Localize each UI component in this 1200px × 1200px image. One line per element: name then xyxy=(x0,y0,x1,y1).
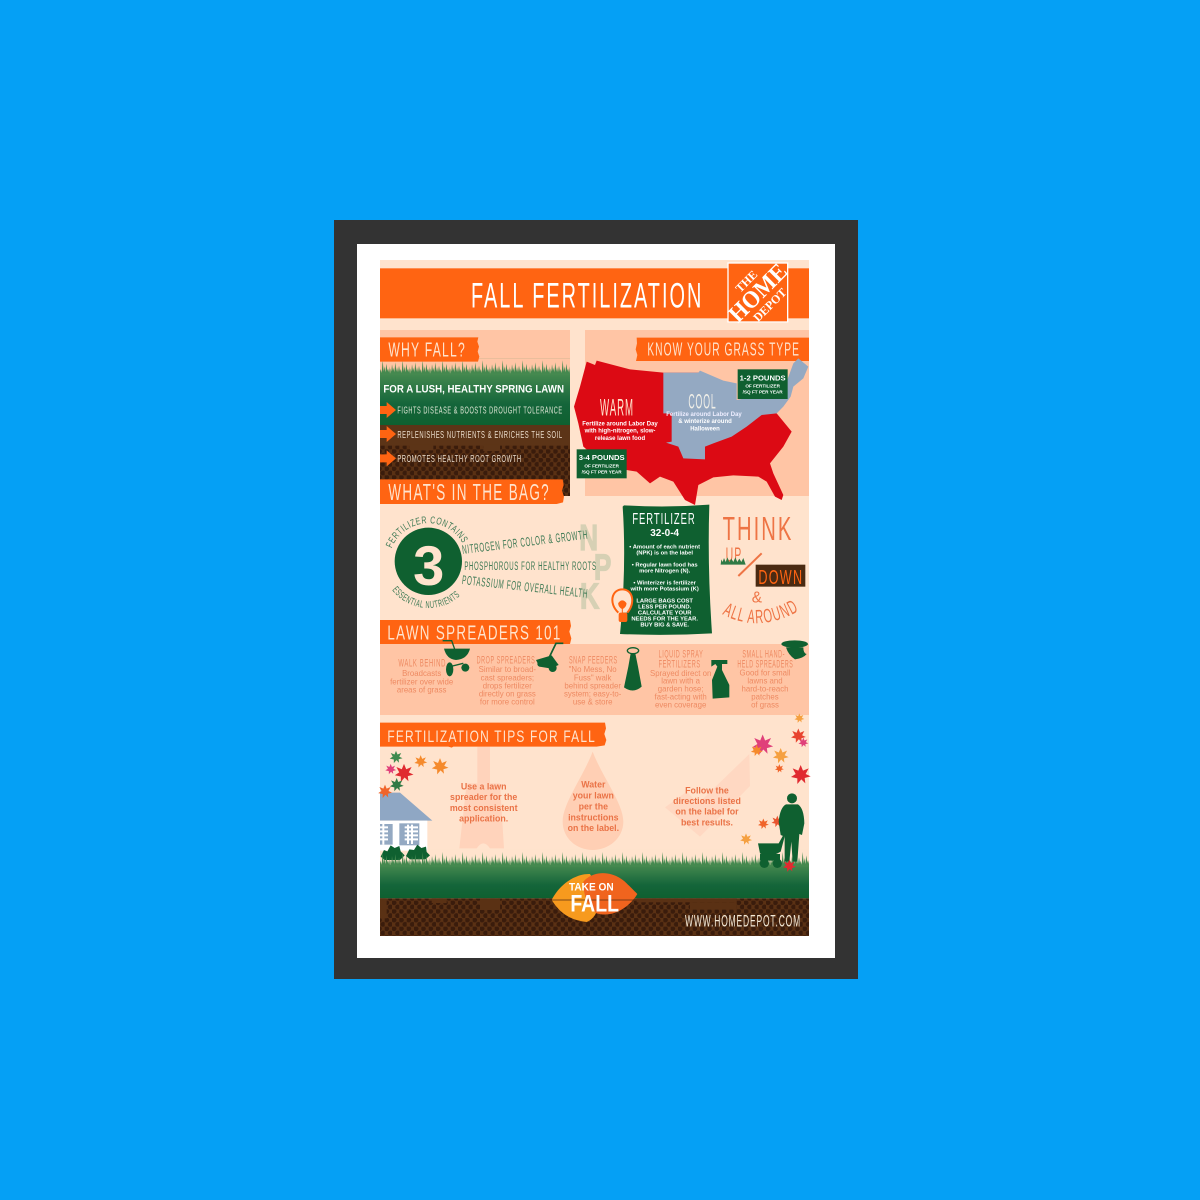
column: drop spreaders xyxy=(477,654,536,706)
column: snap feeders: system; easy-to- xyxy=(564,689,622,698)
icon: light bulb xyxy=(612,589,632,622)
column: walk behind: fertilizer over wide xyxy=(390,677,453,686)
cool label xyxy=(666,388,742,432)
tip 1 xyxy=(450,781,518,824)
column: drop spreaders: DROP SPREADERS xyxy=(477,654,535,666)
icon: walk behind spreader xyxy=(443,641,470,676)
fertilizer bag: CALCULATE YOUR xyxy=(638,611,692,617)
map: warm region xyxy=(574,361,792,505)
column: liquid spray: even coverage xyxy=(655,700,706,709)
fertilizer bag: more Nitrogen (N). xyxy=(639,568,691,574)
panel: lawn spreaders xyxy=(380,620,809,715)
slash xyxy=(738,553,762,576)
leaves: right cluster xyxy=(740,713,811,845)
what's in the bag banner xyxy=(380,479,564,505)
column: snap feeders: "No Mess, No xyxy=(569,665,617,674)
column: walk behind: Broadcasts xyxy=(402,669,441,678)
title bar xyxy=(380,268,809,318)
column: hand-held spreaders: hard-to-reach xyxy=(741,685,788,694)
callout: 1-2 pounds: 1-2 POUNDS xyxy=(740,374,786,383)
what's in the bag banner: WHAT'S IN THE BAG? xyxy=(388,479,550,505)
ghost icon: water drop xyxy=(563,752,623,850)
tips banner: FERTILIZATION TIPS FOR FALL xyxy=(387,727,596,746)
tip 2: on the label. xyxy=(568,823,619,833)
benefit 3: PROMOTES HEALTHY ROOT GROWTH xyxy=(397,454,522,465)
icon: hand-held spreader xyxy=(781,640,808,659)
fertilizer bag: • Amount of each nutrient xyxy=(629,544,700,550)
column: liquid spray: FERTILIZERS xyxy=(659,658,701,670)
icon: drop spreader xyxy=(536,643,563,672)
logo: The Home Depot: THE xyxy=(732,267,760,295)
grass type banner xyxy=(636,338,809,361)
fertilizer bag: LARGE BAGS COST xyxy=(636,598,693,604)
shrubs xyxy=(381,845,430,860)
column: liquid spray: lawn with a xyxy=(661,677,701,686)
benefit 2 xyxy=(380,426,563,442)
icon: snap feeder xyxy=(624,648,642,691)
cool label: Halloween xyxy=(690,426,720,432)
logo: The Home Depot: HOME xyxy=(724,259,793,328)
column: liquid spray: garden hose; xyxy=(658,685,704,694)
warm label: with high-nitrogen, slow- xyxy=(584,429,655,435)
arc label bottom: ESSENTIAL NUTRIENTS xyxy=(392,586,460,608)
tip 3: directions listed xyxy=(673,796,741,806)
panel: grass type xyxy=(574,330,809,505)
nutrient: potassium: POTASSIUM FOR OVERALL HEALTH xyxy=(461,573,589,601)
lawn spreaders banner xyxy=(380,620,571,645)
benefit 3 xyxy=(380,450,522,466)
soil strip xyxy=(380,898,809,936)
fertilizer bag: • Regular lawn food has xyxy=(632,562,698,568)
column: drop spreaders: drops fertilizer xyxy=(483,681,532,690)
ghost icon: spreader xyxy=(459,747,504,848)
leaf at feet xyxy=(783,859,796,872)
callout: 3-4 pounds xyxy=(577,449,627,478)
NPK letters xyxy=(579,517,611,617)
take on fall leaf badge: FALL xyxy=(570,890,619,917)
column: snap feeders: use & store xyxy=(573,697,612,706)
fertilizer bag: NEEDS FOR THE YEAR. xyxy=(631,617,698,623)
tip 2: instructions xyxy=(568,812,619,822)
fertilizer bag: FERTILIZER xyxy=(632,511,696,528)
all around: ALL AROUND xyxy=(722,600,796,624)
up with grass xyxy=(721,544,746,567)
warm label xyxy=(582,395,658,442)
NPK letters: P xyxy=(594,546,611,587)
column: snap feeders: behind spreader xyxy=(564,681,621,690)
benefit 1 xyxy=(380,402,563,418)
column: snap feeders xyxy=(564,654,622,706)
tip 2: your lawn xyxy=(573,791,614,801)
callout: 3-4 pounds: OF FERTILIZER xyxy=(584,463,620,468)
tip 1: Use a lawn xyxy=(461,781,506,791)
take on fall leaf badge: TAKE ON xyxy=(569,881,614,893)
grass strip xyxy=(380,850,809,898)
panel: lawn spreaders: HELD SPREADERS xyxy=(737,658,793,670)
column: walk behind: WALK BEHIND xyxy=(398,658,446,670)
ghost icon: arrow check xyxy=(665,754,750,837)
column: liquid spray: LIQUID SPRAY xyxy=(659,648,703,660)
nutrient: phosphorous: PHOSPHOROUS FOR HEALTHY ROOTS xyxy=(464,559,597,573)
fertilizer bag xyxy=(620,505,712,635)
subhead: FOR A LUSH, HEALTHY SPRING LAWN xyxy=(383,384,564,396)
cool label: & winterize around xyxy=(678,419,732,425)
down box: DOWN xyxy=(758,566,803,589)
take on fall leaf badge xyxy=(542,873,646,922)
tip 3: best results. xyxy=(681,818,733,828)
tip 2: Water xyxy=(581,780,606,790)
title bar: FALL FERTILIZATION xyxy=(471,276,703,315)
tip 2 xyxy=(568,780,619,833)
NPK letters: N xyxy=(579,517,598,558)
cool label: COOL xyxy=(688,388,717,413)
benefit 2: REPLENISHES NUTRIENTS & ENRICHES THE SOIL xyxy=(397,430,563,441)
think: THINK xyxy=(723,511,793,548)
warm label: WARM xyxy=(600,395,634,422)
tip 1: spreader for the xyxy=(450,792,517,802)
lower poster section xyxy=(378,713,811,936)
column: hand-held spreaders: Good for small xyxy=(740,669,791,678)
man with spreader xyxy=(758,793,804,868)
column: liquid spray: fast-acting with xyxy=(655,693,707,702)
column: walk behind xyxy=(390,658,453,694)
up with grass: UP xyxy=(726,544,742,567)
panel: why fall xyxy=(380,330,570,496)
column: liquid spray: Sprayed direct on xyxy=(650,669,711,678)
leaves: left cluster xyxy=(378,751,448,798)
callout: 3-4 pounds: 3-4 POUNDS xyxy=(579,453,625,462)
white mat xyxy=(357,244,835,958)
NPK letters: K xyxy=(580,576,599,617)
middle poster section xyxy=(380,504,809,715)
fertilizer bag: 32-0-4 xyxy=(650,528,680,539)
cool label: Fertilize around Labor Day xyxy=(666,412,742,418)
arc label top: FERTILIZER CONTAINS xyxy=(386,516,468,548)
tip 2: per the xyxy=(579,801,608,811)
fertilizer bag: BUY BIG & SAVE. xyxy=(640,623,689,629)
column: hand-held spreaders: patches xyxy=(751,693,779,702)
house xyxy=(380,793,432,851)
column: walk behind: areas of grass xyxy=(397,685,447,694)
icon: spray bottle xyxy=(711,660,729,699)
lawn spreaders banner: LAWN SPREADERS 101 xyxy=(387,623,562,645)
fertilizer bag: with more Potassium (K) xyxy=(629,587,699,593)
column: hand-held spreaders: of grass xyxy=(751,701,779,710)
three nutrients badge xyxy=(386,516,468,608)
nutrient: nitrogen: NITROGEN FOR COLOR & GROWTH xyxy=(461,528,589,557)
down box xyxy=(756,565,805,589)
ampersand: & xyxy=(752,590,764,607)
column: drop spreaders: for more control xyxy=(480,697,535,706)
upper poster section xyxy=(380,251,809,505)
column: drop spreaders: Similar to broad- xyxy=(479,665,536,674)
tip 1: application. xyxy=(459,814,508,824)
fertilizer bag: • Winterizer is fertilizer xyxy=(633,580,697,586)
tip 3: on the label for xyxy=(675,807,739,817)
column: hand-held spreaders: SMALL HAND- xyxy=(742,648,785,660)
soil xyxy=(380,425,570,496)
callout: 1-2 pounds: /SQ FT PER YEAR xyxy=(743,390,783,395)
logo: The Home Depot: DEPOT xyxy=(750,285,789,324)
poster background xyxy=(380,260,809,936)
three nutrients badge: 3 xyxy=(413,534,444,597)
column: drop spreaders: cast spreaders; xyxy=(481,673,534,682)
benefit 1: FIGHTS DISEASE & BOOSTS DROUGHT TOLERANCE xyxy=(397,405,563,416)
grass type banner: KNOW YOUR GRASS TYPE xyxy=(647,339,800,360)
warm label: release lawn food xyxy=(595,436,645,442)
column: hand-held spreaders xyxy=(737,648,793,710)
warm label: Fertilize around Labor Day xyxy=(582,422,658,428)
why fall banner xyxy=(380,337,479,362)
column: snap feeders: SNAP FEEDERS xyxy=(569,654,618,666)
map: cool region xyxy=(663,358,808,459)
fertilizer bag: (NPK) is on the label xyxy=(636,550,693,556)
picture frame xyxy=(334,220,858,979)
callout: 3-4 pounds: /SQ FT PER YEAR xyxy=(582,469,622,474)
tip 1: most consistent xyxy=(450,803,518,813)
grass xyxy=(380,358,570,425)
website url: WWW.HOMEDEPOT.COM xyxy=(685,912,801,931)
column: liquid spray xyxy=(650,648,711,709)
column: drop spreaders: directly on grass xyxy=(479,689,536,698)
tip 3 xyxy=(673,785,741,828)
column: hand-held spreaders: lawns and xyxy=(747,677,783,686)
tip 3: Follow the xyxy=(685,785,729,795)
fertilizer bag: LESS PER POUND. xyxy=(638,605,692,611)
tips banner xyxy=(380,723,606,748)
why fall banner: WHY FALL? xyxy=(388,339,466,362)
callout: 1-2 pounds xyxy=(738,369,788,399)
column: snap feeders: Fuss" walk xyxy=(574,673,612,682)
callout: 1-2 pounds: OF FERTILIZER xyxy=(745,383,781,388)
